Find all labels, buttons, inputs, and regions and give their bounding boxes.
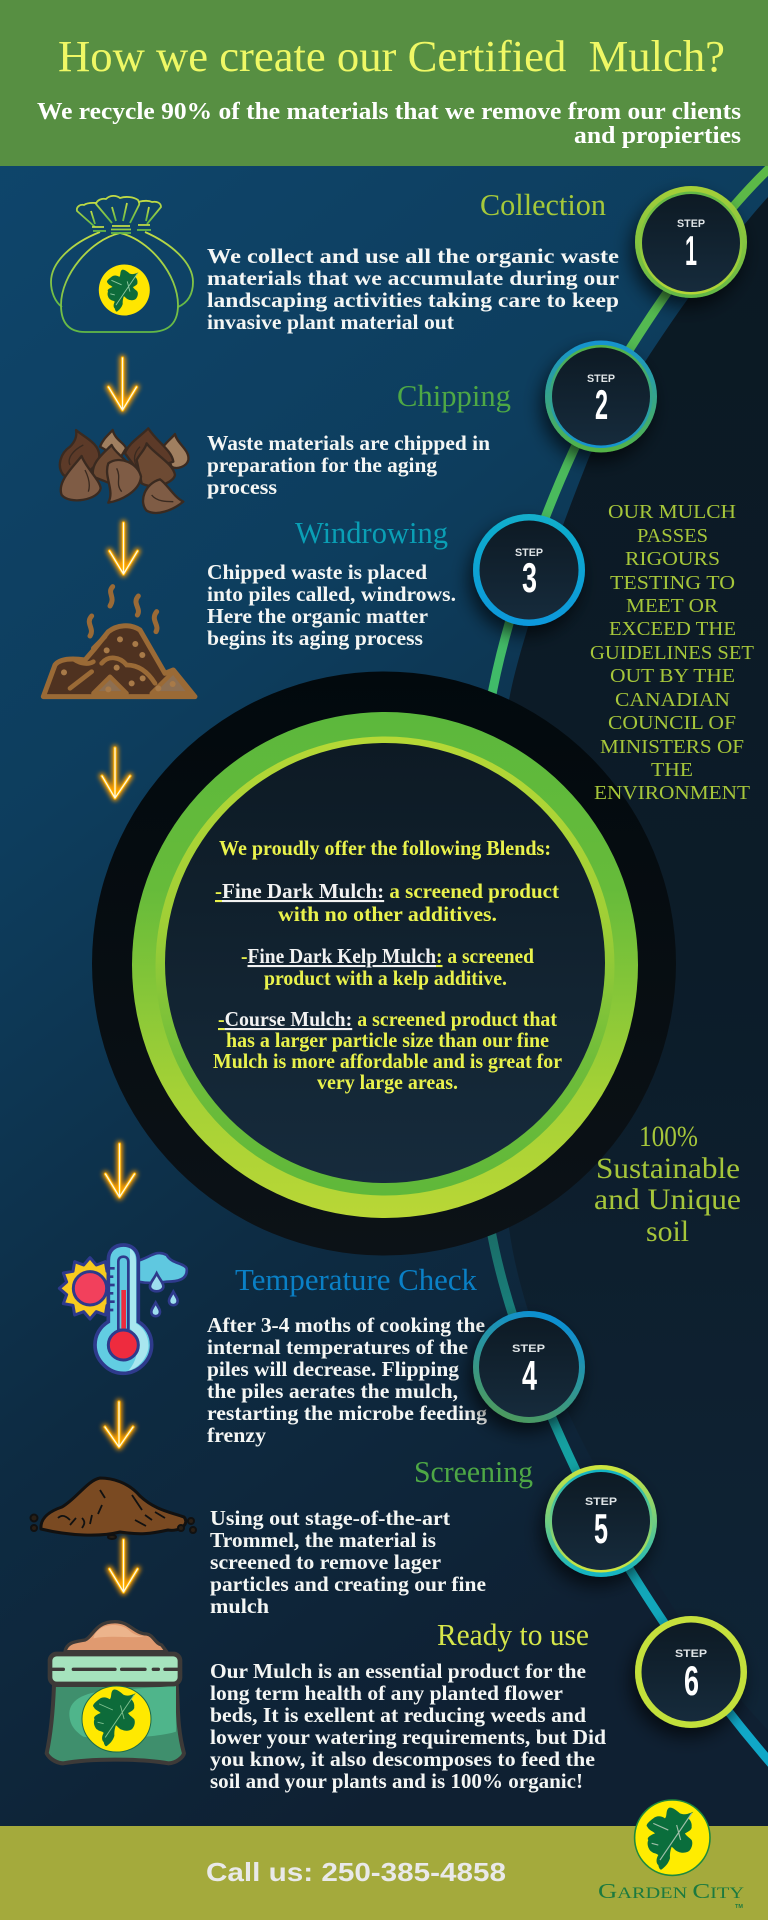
- text: windrowing: begins its aging process: [207, 626, 423, 650]
- call to action: Call us: 250-385-4858: [206, 1857, 506, 1887]
- side note: testing standards: ENVIRONMENT: [594, 782, 750, 804]
- heading: temperature check: Temperature Check: [235, 1262, 477, 1297]
- step 6 badge: 6: [684, 1657, 699, 1704]
- text: ready to use: lower your watering requirements, but Did: [210, 1725, 606, 1749]
- step 1 badge: STEP: [677, 218, 705, 230]
- icon: collection bags: [51, 196, 193, 332]
- step 6 badge: [635, 1616, 747, 1728]
- text: temperature check: the piles aerates the mulch,: [207, 1379, 458, 1403]
- step 1 badge: 1: [685, 227, 697, 274]
- text: windrowing: Chipped waste is placed: [207, 560, 427, 584]
- side note: sustainable soil: soil: [646, 1215, 689, 1248]
- side note: testing standards: PASSES: [637, 525, 708, 547]
- side note: testing standards: GUIDELINES SET: [590, 642, 754, 664]
- text: chipping: preparation for the aging: [207, 453, 438, 477]
- step 2 badge: STEP: [587, 373, 615, 385]
- central blends circle: [92, 672, 676, 1256]
- text: screening: screened to remove lager: [210, 1550, 441, 1574]
- side note: sustainable soil: [594, 1120, 741, 1248]
- text: chipping: process: [207, 475, 277, 499]
- side note: sustainable soil: 100%: [639, 1120, 698, 1153]
- step 3 badge: STEP: [515, 547, 543, 559]
- blend: course mulch: -Course Mulch: a screened product that: [218, 1007, 557, 1031]
- blend: course mulch: very large areas.: [317, 1070, 458, 1094]
- side note: testing standards: MINISTERS OF: [600, 736, 744, 758]
- text: windrowing: [207, 560, 456, 650]
- text: ready to use: long term health of any planted flower: [210, 1681, 563, 1705]
- text: windrowing: Here the organic matter: [207, 604, 428, 628]
- subtitle: [37, 99, 741, 149]
- text: collection: We collect and use all the organic waste: [207, 244, 619, 268]
- text: windrowing: into piles called, windrows.: [207, 582, 456, 606]
- icon: wood chips: [60, 428, 188, 513]
- icon: mulch sack: [47, 1622, 184, 1763]
- arrow 1: [108, 358, 136, 410]
- side note: testing standards: RIGOURS: [625, 548, 720, 570]
- icon: soil pile: [30, 1478, 196, 1539]
- blend: fine dark mulch: with no other additives.: [278, 902, 497, 926]
- heading: collection: Collection: [480, 187, 606, 222]
- icon: thermometer with sun and rain: [59, 1245, 187, 1373]
- text: collection: materials that we accumulate during our: [207, 266, 619, 290]
- text: ready to use: soil and your plants and is 100% organic!: [210, 1769, 583, 1793]
- blend: course mulch: Mulch is more affordable and is great for: [213, 1049, 562, 1073]
- side note: testing standards: CANADIAN: [615, 689, 730, 711]
- step 2 badge: 2: [595, 381, 608, 428]
- icon: steaming windrow pile: [43, 587, 195, 697]
- subtitle: We recycle 90% of the materials that we remove from our clients: [37, 99, 741, 125]
- step 6 badge: STEP: [675, 1648, 707, 1660]
- text: collection: landscaping activities taking care to keep: [207, 288, 619, 312]
- text: temperature check: internal temperatures of the: [207, 1335, 468, 1359]
- text: ready to use: Our Mulch is an essential product for the: [210, 1659, 586, 1683]
- step 4 badge: 4: [522, 1352, 537, 1399]
- blend: course mulch: has a larger particle size than our fine: [226, 1028, 549, 1052]
- side note: testing standards: THE: [651, 759, 693, 781]
- side note: testing standards: EXCEED THE: [609, 618, 736, 640]
- header band: [0, 0, 768, 166]
- heading: windrowing: Windrowing: [295, 515, 448, 550]
- text: ready to use: beds, It is exellent at reducing weeds and: [210, 1703, 586, 1727]
- step path line: lower: [490, 1225, 768, 1768]
- side note: testing standards: TESTING TO: [610, 572, 735, 594]
- step 5 badge: 5: [594, 1505, 608, 1552]
- logo: Garden City: TM: [735, 1904, 743, 1910]
- side note: testing standards: OUT BY THE: [610, 665, 735, 687]
- arrow 4: [106, 1144, 134, 1197]
- logo: Garden City: G ARDEN CITY: [598, 1879, 745, 1903]
- heading: ready to use: Ready to use: [437, 1617, 589, 1652]
- heading: screening: Screening: [414, 1454, 533, 1489]
- text: temperature check: After 3-4 moths of cooking the: [207, 1313, 485, 1337]
- title: How we create our Certified Mulch?: [58, 32, 725, 81]
- text: ready to use: you know, it also descomposes to feed the: [210, 1747, 595, 1771]
- text: screening: mulch: [210, 1594, 269, 1618]
- text: screening: particles and creating our fine: [210, 1572, 486, 1596]
- text: screening: [210, 1506, 486, 1618]
- side note: testing standards: [590, 501, 754, 804]
- step path line: upper: [490, 163, 768, 705]
- arrow 6: [110, 1540, 138, 1592]
- step 1 badge: [635, 186, 747, 298]
- footer band: [0, 1826, 768, 1920]
- text: collection: invasive plant material out: [207, 310, 454, 334]
- text: screening: Using out stage-of-the-art: [210, 1506, 450, 1530]
- text: chipping: [207, 431, 490, 499]
- text: temperature check: restarting the microbe feeding: [207, 1401, 488, 1425]
- text: temperature check: piles will decrease. Flipping: [207, 1357, 459, 1381]
- side note: sustainable soil: and Unique: [594, 1183, 741, 1216]
- dark right panel: [509, 197, 768, 1730]
- text: screening: Trommel, the material is: [210, 1528, 436, 1552]
- arrow 3: [102, 748, 130, 798]
- blend: fine dark kelp mulch: [241, 944, 534, 990]
- step 3 badge: 3: [522, 554, 537, 601]
- blend: fine dark kelp mulch: -Fine Dark Kelp Mulch: a screened: [241, 944, 534, 968]
- text: collection: [207, 244, 619, 334]
- text: temperature check: [207, 1313, 488, 1447]
- arrow 2: [110, 523, 138, 574]
- step 4 badge: [473, 1311, 585, 1423]
- side note: testing standards: MEET OR: [626, 595, 718, 617]
- side note: sustainable soil: Sustainable: [596, 1152, 740, 1185]
- blend: fine dark mulch: [215, 879, 559, 926]
- heading: chipping: Chipping: [397, 378, 511, 413]
- arrow 5: [105, 1402, 133, 1447]
- text: ready to use: [210, 1659, 606, 1793]
- text: chipping: Waste materials are chipped in: [207, 431, 490, 455]
- step 3 badge: [473, 514, 585, 626]
- blends intro: We proudly offer the following Blends:: [219, 836, 551, 860]
- step 5 badge: STEP: [585, 1496, 617, 1508]
- step 2 badge: [545, 340, 657, 452]
- step 4 badge: STEP: [512, 1343, 545, 1355]
- step 5 badge: [545, 1465, 657, 1577]
- side note: testing standards: COUNCIL OF: [608, 712, 736, 734]
- side note: testing standards: OUR MULCH: [608, 501, 736, 523]
- text: temperature check: frenzy: [207, 1423, 267, 1447]
- logo: Garden City: [598, 1800, 745, 1910]
- blend: course mulch: [213, 1007, 562, 1094]
- subtitle: and propierties: [574, 123, 741, 149]
- blend: fine dark kelp mulch: product with a kelp additive.: [264, 966, 507, 990]
- blend: fine dark mulch: -Fine Dark Mulch: a screened product: [215, 879, 559, 903]
